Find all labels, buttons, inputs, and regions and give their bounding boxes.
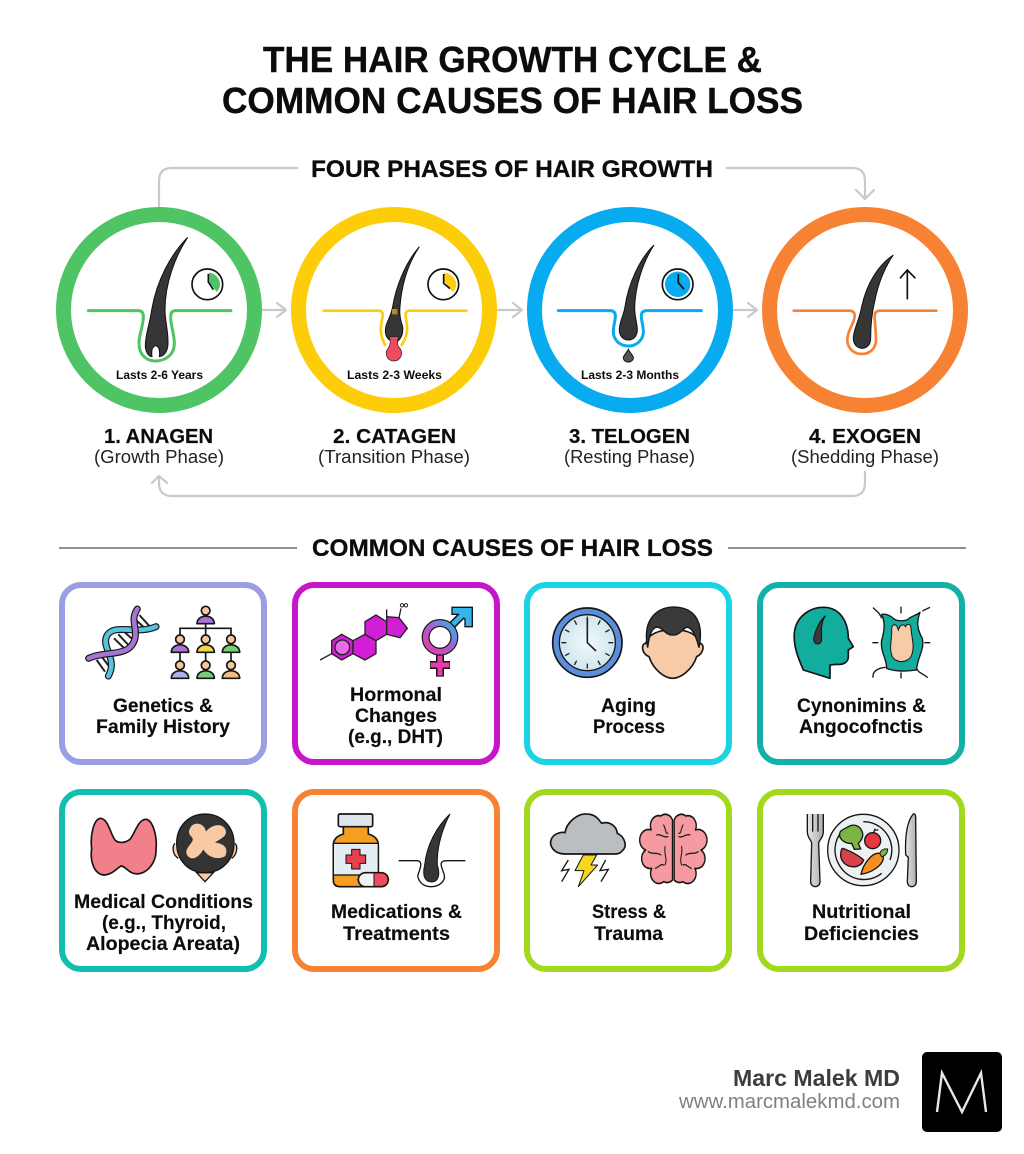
card label: (e.g., Thyroid, <box>102 913 226 934</box>
ring: anagen <box>64 214 254 406</box>
title: COMMON CAUSES OF HAIR LOSS <box>222 80 803 121</box>
panel: hormonal changes <box>295 585 497 762</box>
phase description: (Resting Phase) <box>564 447 695 467</box>
phase description: (Growth Phase) <box>94 447 224 467</box>
heading: four phases of hair growth: FOUR PHASES OF HAIR GROWTH <box>311 156 713 183</box>
panel: medical conditions <box>62 792 264 969</box>
panel: cynonimins and angocofnctis <box>760 585 962 762</box>
card label: Changes <box>355 706 437 727</box>
card label: Treatments <box>343 924 450 945</box>
card label <box>348 685 443 748</box>
card frame <box>760 792 962 969</box>
card label <box>593 696 665 738</box>
label: duration: Lasts 2-3 Months <box>581 368 679 382</box>
label: duration: Lasts 2-6 Years <box>116 368 203 382</box>
icon: teal head and abstract tissue <box>794 607 930 678</box>
ring: catagen <box>298 214 490 406</box>
panel: aging process <box>527 585 729 762</box>
title: THE HAIR GROWTH CYCLE & <box>263 39 762 80</box>
icon: medicine bottle, pill and hair follicle <box>333 814 465 887</box>
card label <box>797 696 926 738</box>
card frame <box>62 585 264 762</box>
footer: website: www.marcmalekmd.com <box>678 1091 900 1113</box>
footer: author name: Marc Malek MD <box>733 1065 900 1091</box>
phase name: 3. TELOGEN <box>569 426 690 448</box>
phase description: (Transition Phase) <box>318 447 470 467</box>
icon: transitioning hair follicle <box>324 247 466 361</box>
card label: Medical Conditions <box>74 892 253 913</box>
icon: storm cloud and brain <box>551 814 707 887</box>
card label <box>592 902 666 945</box>
card label <box>331 902 462 945</box>
panel: anagen phase <box>64 214 254 467</box>
panel: medications and treatments <box>295 792 497 969</box>
label: duration: Lasts 2-3 Weeks <box>347 368 442 382</box>
panel: catagen phase <box>298 214 490 467</box>
icon: shedding hair follicle <box>794 255 936 354</box>
card label: Angocofnctis <box>799 717 923 738</box>
card label: Deficiencies <box>804 924 919 945</box>
card label: Trauma <box>594 924 663 945</box>
card label <box>804 902 919 945</box>
icon: thyroid and alopecia areata head <box>91 814 237 882</box>
heading: common causes of hair loss: COMMON CAUSES OF HAIR LOSS <box>312 535 713 562</box>
card label: Nutritional <box>812 902 911 923</box>
panel: stress and trauma <box>527 792 729 969</box>
card frame <box>295 585 497 762</box>
arrow: anagen to catagen <box>263 303 286 317</box>
card label: Stress & <box>592 902 666 923</box>
icon: DNA helix and family tree <box>89 606 240 678</box>
arrow: telogen to exogen <box>734 303 757 317</box>
arrow: top right connector into exogen <box>727 168 874 199</box>
arrow: bottom return connector from exogen to anagen <box>152 472 865 496</box>
card frame <box>527 792 729 969</box>
phase name: 1. ANAGEN <box>104 426 213 448</box>
card label: Process <box>593 717 665 738</box>
card label: Hormonal <box>350 685 442 706</box>
card frame <box>527 585 729 762</box>
ring: exogen <box>770 214 960 406</box>
panel: exogen phase <box>770 214 960 467</box>
panel: genetics and family history <box>62 585 264 762</box>
card label: Genetics & <box>113 696 213 717</box>
card label: Alopecia Areata) <box>86 934 240 955</box>
icon: M logo <box>922 1052 1002 1132</box>
phase name: 2. CATAGEN <box>333 426 456 448</box>
arrow: top left connector from anagen <box>159 168 297 207</box>
icon: clock and receding hairline face <box>553 607 703 678</box>
card label: Cynonimins & <box>797 696 926 717</box>
panel: nutritional deficiencies <box>760 792 962 969</box>
card frame <box>62 792 264 969</box>
card label <box>96 696 230 738</box>
card frame <box>760 585 962 762</box>
icon: steroid molecule and gender symbol <box>320 604 472 677</box>
arrow: catagen to telogen <box>498 303 522 317</box>
panel: telogen phase <box>534 214 726 467</box>
card label <box>74 892 253 955</box>
card label: Medications & <box>331 902 462 923</box>
icon: resting hair follicle <box>558 245 701 362</box>
card label: Family History <box>96 717 230 738</box>
title <box>222 39 803 121</box>
card frame <box>295 792 497 969</box>
ring: telogen <box>534 214 726 406</box>
card label: Aging <box>601 696 656 717</box>
card label: (e.g., DHT) <box>348 727 443 748</box>
phase description: (Shedding Phase) <box>791 447 939 467</box>
phase name: 4. EXOGEN <box>809 426 921 448</box>
icon: plate of food with fork and knife <box>807 814 916 887</box>
icon: growing hair follicle <box>88 237 231 361</box>
